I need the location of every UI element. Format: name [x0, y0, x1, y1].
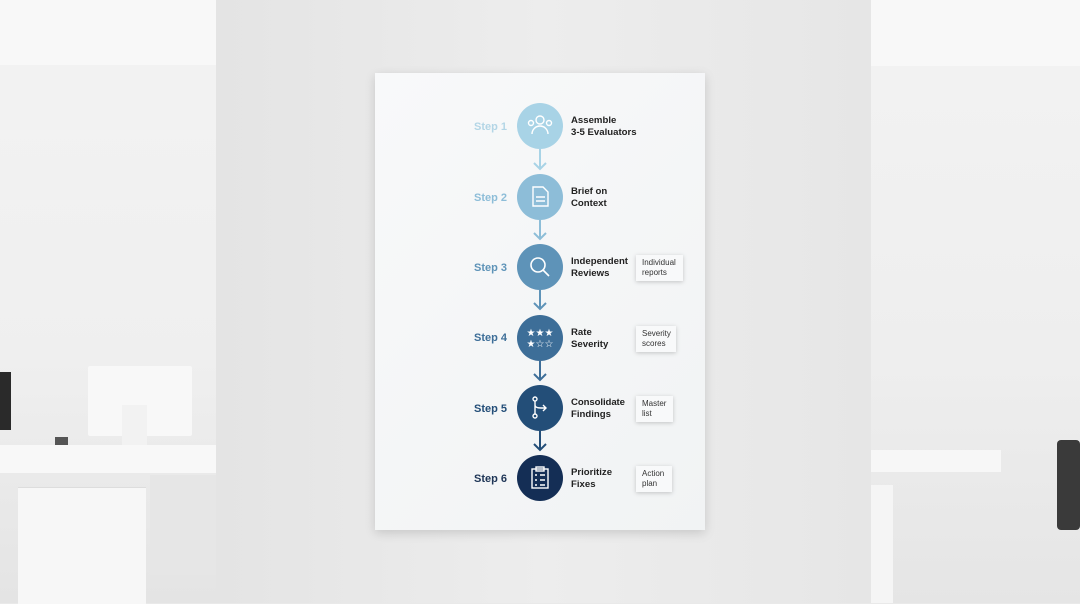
step 1: Step 1 [474, 121, 507, 133]
step 3: Reviews [571, 268, 609, 279]
background: left room [0, 0, 216, 603]
step 3: Individual [642, 258, 676, 267]
step 4: Rate [571, 327, 592, 338]
step 5: Findings [571, 409, 611, 420]
step 2 [474, 174, 608, 220]
step 4: Severity [642, 329, 671, 338]
poster [375, 73, 705, 530]
step 1: 3-5 Evaluators [571, 127, 637, 138]
step 6: Fixes [571, 479, 596, 490]
step 6 [474, 455, 672, 501]
step 5: Master [642, 399, 667, 408]
step 2: Step 2 [474, 192, 507, 204]
step 4: Step 4 [474, 332, 508, 344]
step 3: Independent [571, 256, 629, 267]
step 5: Consolidate [571, 397, 625, 408]
step 2: Brief on [571, 186, 607, 197]
step 5: Step 5 [474, 403, 507, 415]
step 6: Step 6 [474, 473, 507, 485]
step 1: Assemble [571, 115, 616, 126]
step 6: plan [642, 479, 657, 488]
step 3: Step 3 [474, 262, 507, 274]
step 6: Action [642, 469, 664, 478]
monitor white [88, 366, 192, 436]
drawers [18, 487, 146, 604]
step 2: Context [571, 198, 608, 209]
step 5 [474, 385, 673, 431]
step 4: Severity [571, 339, 609, 350]
background: center wall [216, 0, 871, 603]
step 4: scores [642, 339, 666, 348]
step 4 [474, 315, 676, 361]
step 1 [474, 103, 637, 149]
step 3: reports [642, 268, 667, 277]
desk [0, 445, 216, 473]
step 4: ★★★ [527, 328, 553, 339]
step 3 [474, 244, 683, 290]
monitor dark [0, 372, 11, 430]
step 6: Prioritize [571, 467, 612, 478]
arrows [534, 149, 546, 450]
pen cup [55, 437, 68, 456]
background: right room [871, 0, 1080, 603]
step 4: ★☆☆ [527, 339, 553, 350]
step 5: list [642, 409, 653, 418]
